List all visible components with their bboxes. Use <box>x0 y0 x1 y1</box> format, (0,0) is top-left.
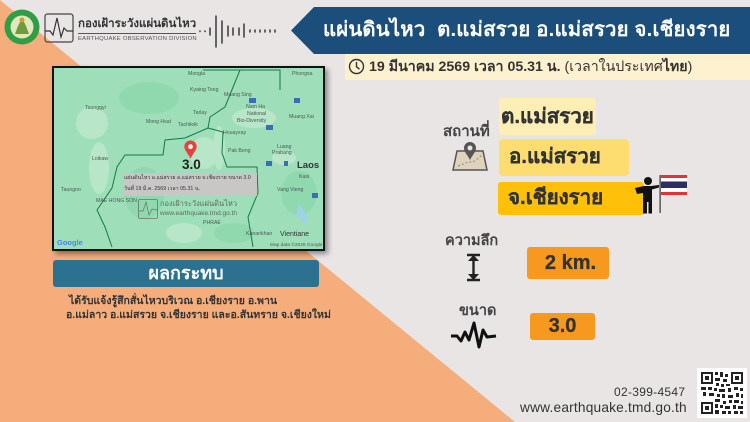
location label: สถานที่ <box>443 123 490 140</box>
date text: 19 มีนาคม 2569 เวลา 05.31 น. (เวลาในประเทศไทย) <box>369 59 692 75</box>
division name English <box>78 33 196 43</box>
province chip <box>498 182 644 215</box>
district chip: อ.แม่สรวย <box>509 145 601 168</box>
impact heading: ผลกระทบ <box>148 263 224 283</box>
division name Thai: กองเฝ้าระวังแผ่นดินไหว <box>78 18 196 30</box>
map place labels: Mongla <box>188 71 205 77</box>
division name English: EARTHQUAKE OBSERVATION DIVISION <box>78 36 197 42</box>
watermark name: กองเฝ้าระวังแผ่นดินไหว <box>160 199 237 208</box>
map place labels: Laos <box>297 160 319 171</box>
magnitude value chip: 3.0 <box>549 315 576 337</box>
map place labels: Nam Ha <box>246 104 265 110</box>
title banner <box>291 7 750 54</box>
sub-district chip: ต.แม่สรวย <box>501 105 594 128</box>
map place labels: Kasi <box>299 174 309 180</box>
magnitude value chip <box>530 313 595 340</box>
date strip <box>345 54 750 80</box>
map place labels: Phongsa <box>292 71 313 77</box>
map place labels: Kyaing Tong <box>190 87 219 93</box>
map place labels: Bio-Diversity <box>237 118 267 124</box>
logo: department seal <box>4 10 40 44</box>
caption line 2: วันที่ 19 มี.ค. 2569 เวลา 05.31 น. <box>124 186 200 192</box>
icon: sound wave decoration <box>199 15 276 48</box>
watermark url: www.earthquake.tmd.go.th <box>160 210 237 217</box>
panel: earthquake map <box>52 66 325 251</box>
map place labels: Taunggyi <box>85 105 106 111</box>
magnitude label: ขนาด <box>459 303 496 319</box>
magnitude label on map: 3.0 <box>182 157 201 172</box>
map caption box <box>123 173 257 196</box>
icon: seismic wave <box>451 322 496 348</box>
icon: clock <box>348 58 364 74</box>
map place labels: Tarlay <box>193 110 207 116</box>
map place labels: Taungoo <box>61 187 81 193</box>
map place labels: Loikaw <box>92 156 108 162</box>
map watermark <box>138 199 237 219</box>
map place labels: Vang Vieng <box>277 187 303 193</box>
map place labels: Tachileik <box>178 122 198 128</box>
sub-district chip <box>499 98 596 135</box>
province chip: จ.เชียงราย <box>508 186 603 209</box>
impact description: อ.แม่ลาว อ.แม่สรวย จ.เชียงราย และอ.สันทราย จ.เชียงใหม่ <box>66 309 331 321</box>
depth label: ความลึก <box>445 233 498 249</box>
map place labels: Map data ©2026 Google <box>270 241 323 248</box>
map place labels <box>57 71 323 248</box>
panel: impact <box>53 260 319 287</box>
district chip <box>499 139 629 176</box>
map terrain and borders <box>76 70 318 248</box>
icon: person with Thai flag <box>635 175 687 214</box>
impact description: ได้รับแจ้งรู้สึกสั่นไหวบริเวณ อ.เชียงราย อ.พาน <box>69 295 277 307</box>
icon: depth arrow <box>467 254 480 282</box>
QR code <box>697 368 747 418</box>
title text: แผ่นดินไหว ต.แม่สรวย อ.แม่สรวย จ.เชียงราย <box>323 19 731 41</box>
map place labels: PHRAE <box>203 220 221 226</box>
logo: earthquake observation division <box>44 13 197 43</box>
icon: seismograph frame <box>44 13 74 43</box>
website: www.earthquake.tmd.go.th <box>520 400 687 415</box>
icon: watermark seismograph <box>138 199 158 219</box>
map place labels: Kanankhan <box>246 231 272 237</box>
map place labels: Mong Hsat <box>146 119 172 125</box>
icon: red epicentre pin <box>184 140 197 158</box>
impact description <box>66 292 331 321</box>
map place labels: National <box>247 111 266 117</box>
map place labels: Houayxay <box>223 130 246 136</box>
phone number: 02-399-4547 <box>614 385 685 399</box>
map place labels: Vientiane <box>280 231 309 238</box>
depth value chip <box>527 247 609 279</box>
map place labels: Muang Xai <box>289 114 314 120</box>
caption line 1: แผ่นดินไหว อ.แม่สรวย อ.แม่สรวย จ.เชียงราย ขนาด 3.0 <box>124 175 251 181</box>
icon: map with pin <box>452 142 488 171</box>
map place labels: Pak Beng <box>228 148 251 154</box>
map place labels: Google <box>57 238 83 247</box>
map place labels: Muang Sing <box>224 92 252 98</box>
depth value chip: 2 km. <box>545 252 596 274</box>
map place labels: Luang <box>277 144 292 150</box>
map place labels: MAE HONG SON <box>96 198 137 204</box>
map place labels: Prabang <box>272 150 292 156</box>
